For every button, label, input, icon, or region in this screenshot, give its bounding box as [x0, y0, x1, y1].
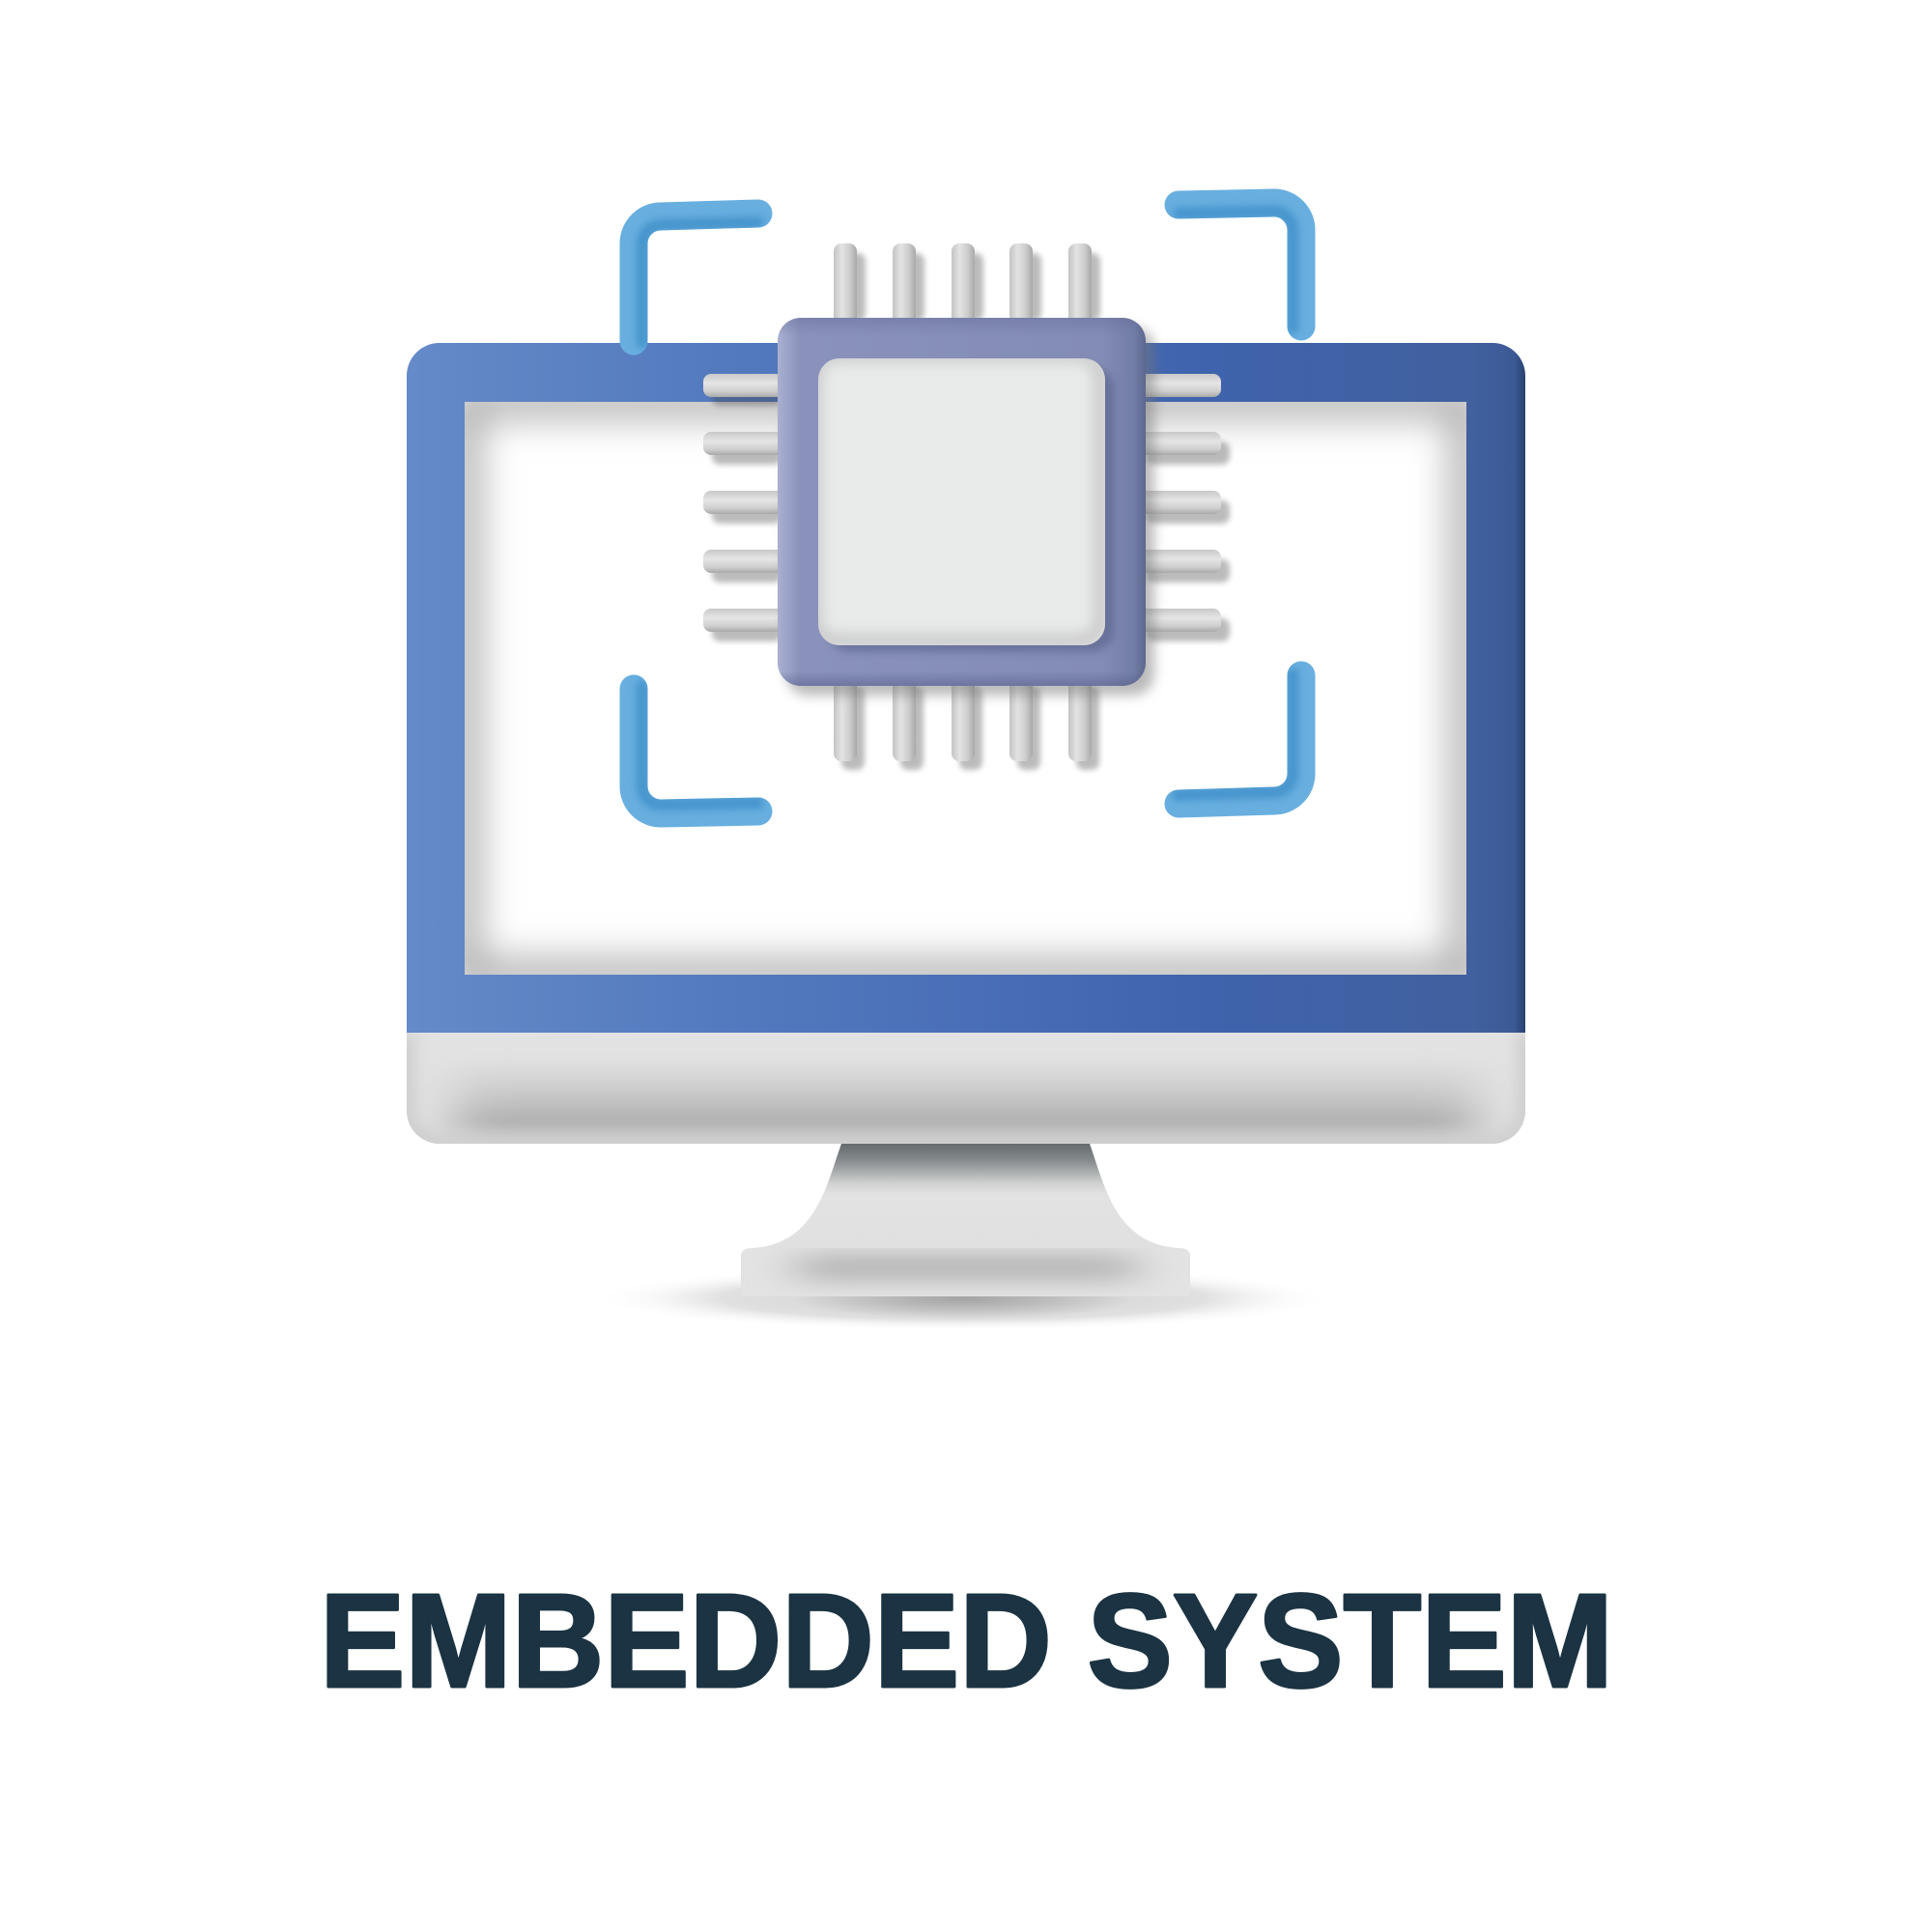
chip die — [814, 355, 1105, 645]
monitor bezel — [407, 343, 1525, 1033]
bracket base strokes — [634, 203, 1301, 813]
icon: microchip — [703, 243, 1230, 770]
icon: corner brackets — [634, 203, 1301, 813]
base shadow — [591, 1265, 1335, 1331]
chip pins bottom — [834, 676, 1092, 761]
chip pins right — [1135, 374, 1221, 632]
icon: desktop monitor — [407, 343, 1525, 1331]
chip die shadow — [829, 367, 1114, 652]
bracket inner shading — [642, 212, 1293, 805]
chip pin shadows — [712, 253, 1230, 770]
title: EMBEDDED SYSTEM — [320, 1567, 1613, 1716]
chip pins left — [703, 374, 790, 632]
monitor stand — [741, 1144, 1190, 1296]
chip pins top — [834, 243, 1092, 330]
monitor chin — [407, 1033, 1525, 1144]
monitor screen — [465, 402, 1466, 975]
chip body shadow — [786, 327, 1154, 696]
chip body — [778, 318, 1146, 686]
